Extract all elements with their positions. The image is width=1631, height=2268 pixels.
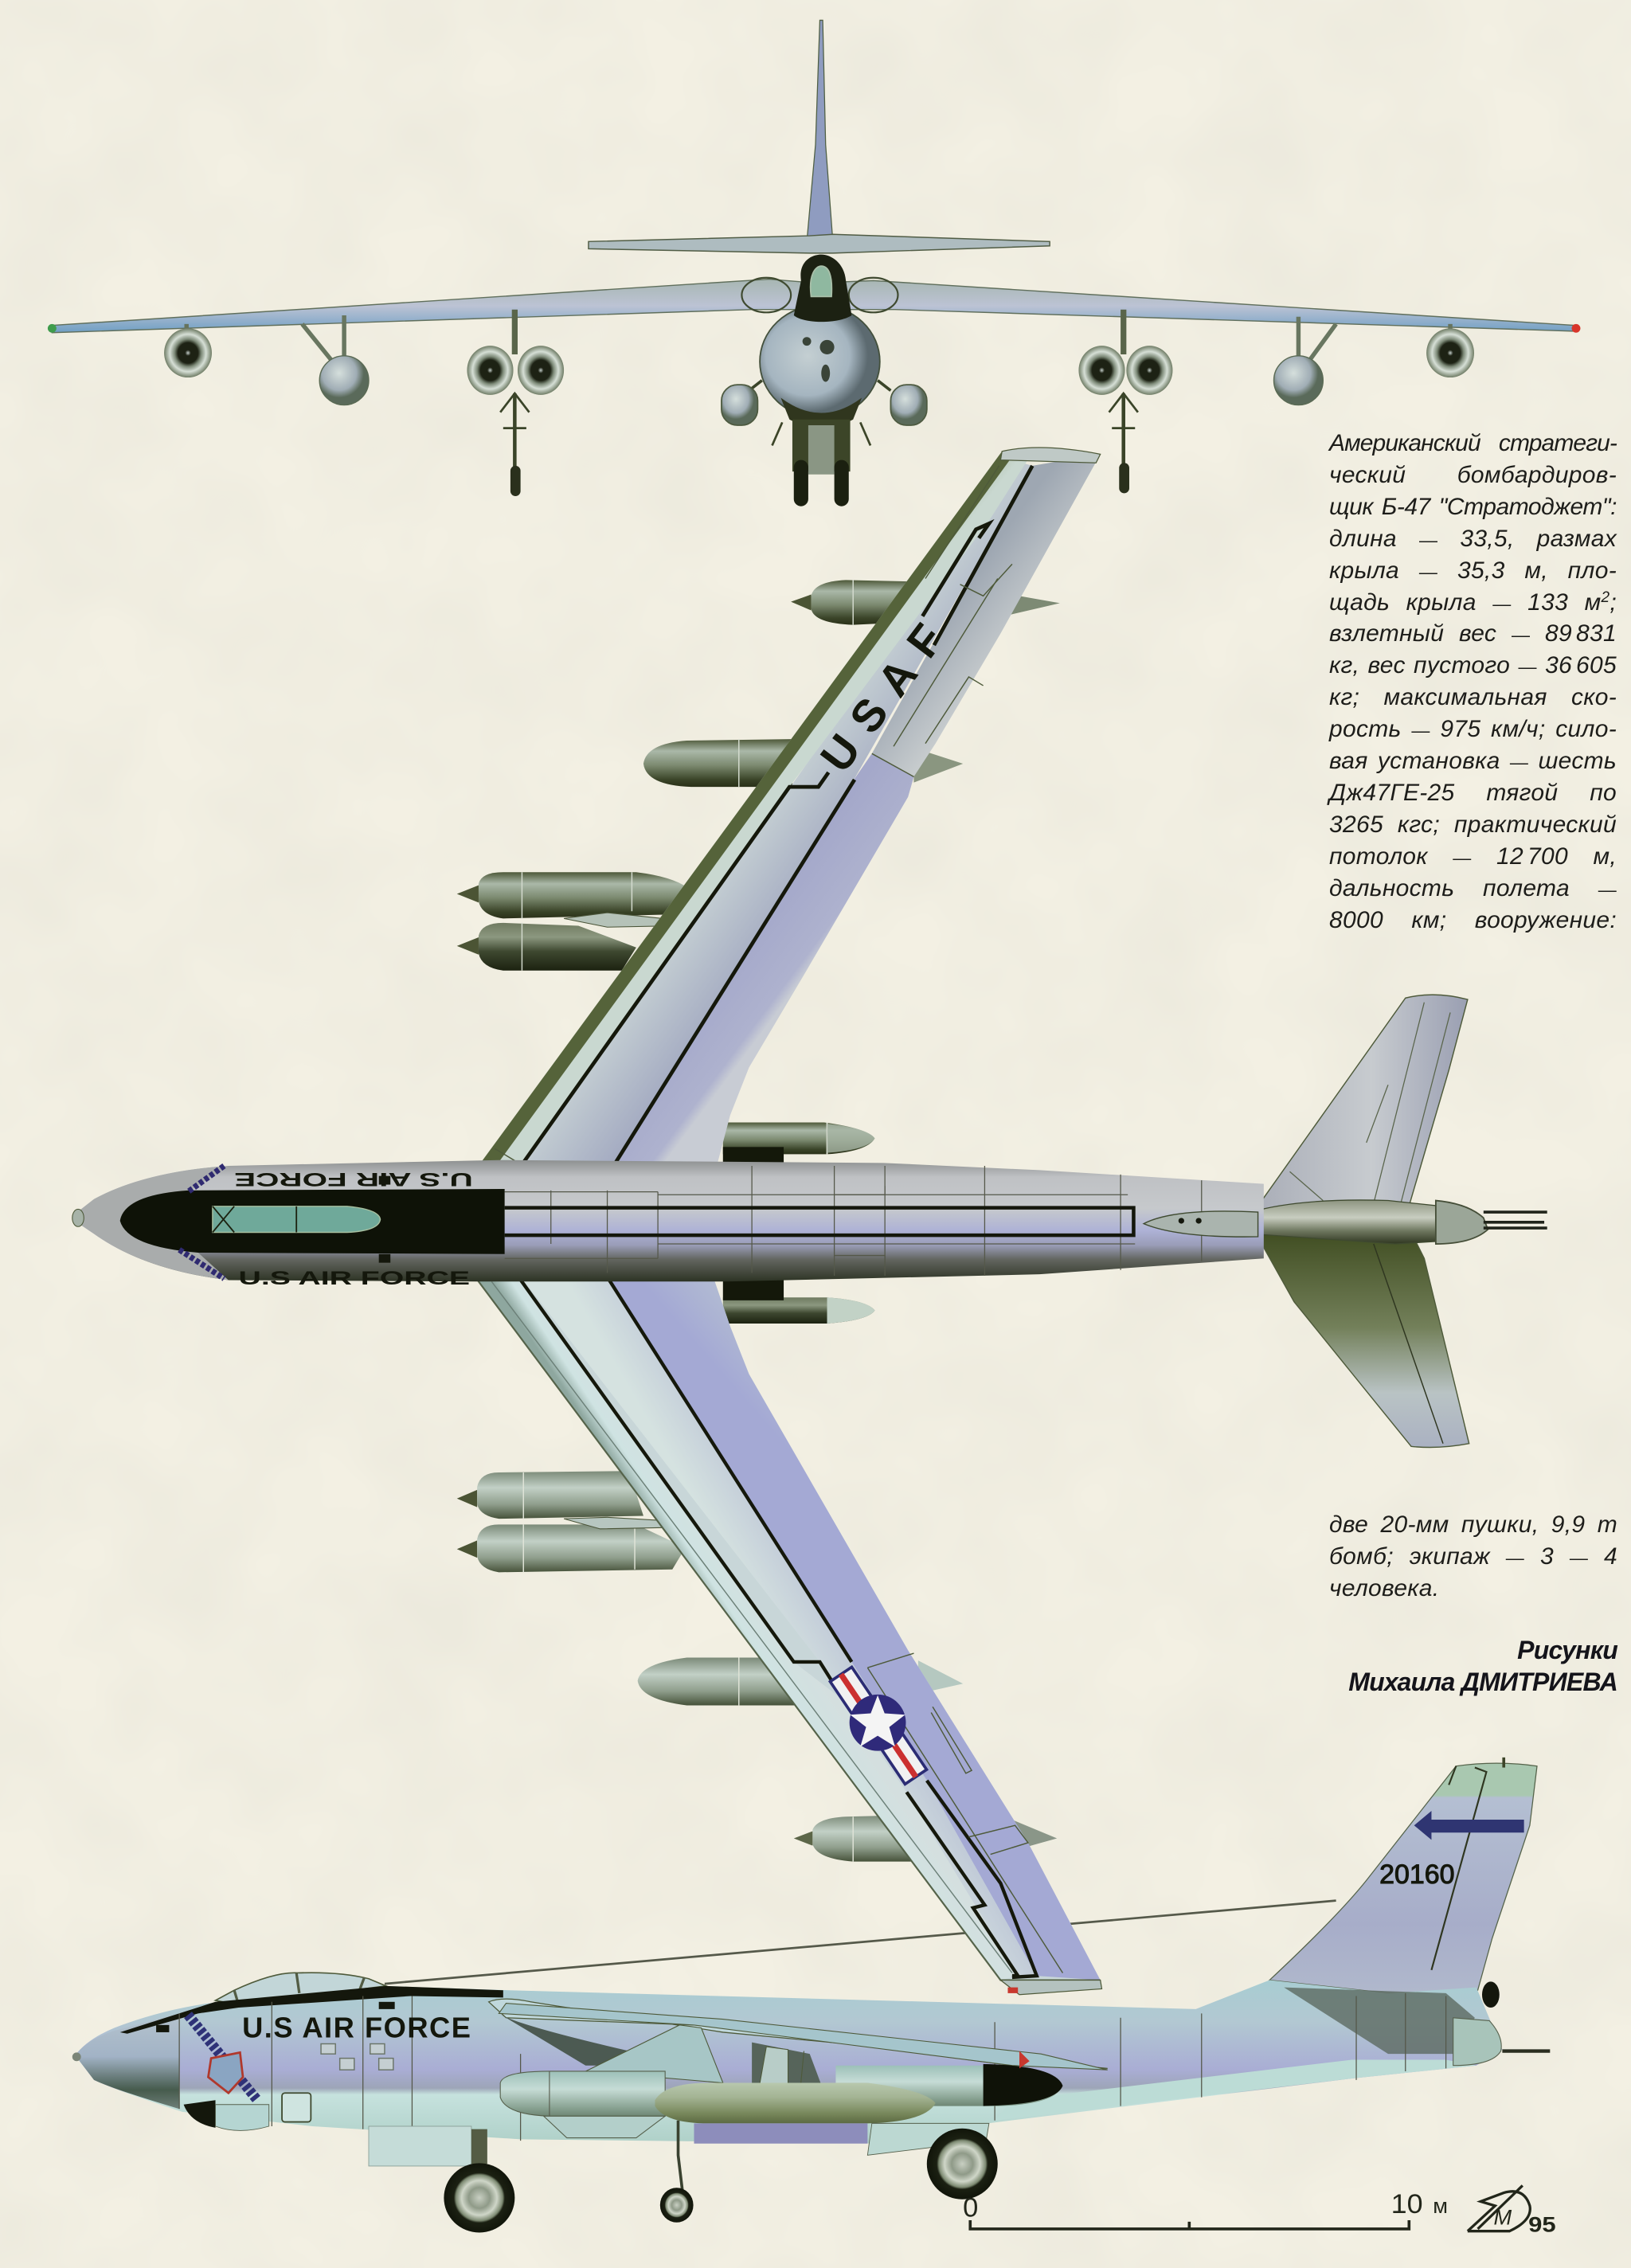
lower wing: edge line [475,1276,1101,1981]
side view: fin rudder line [1431,1766,1486,1970]
upper wing: outer trailing panels [872,454,1101,776]
side view: fin [1269,1763,1537,1993]
text block: specifications: Американский стратеги- [1329,430,1617,456]
monogram year: 95 [1528,2212,1556,2237]
lower wing: trailing panel [600,1265,1101,1981]
upper wing: leading edge [475,452,1030,1180]
side view: nose cone [75,2013,179,2109]
side view: access panel [282,2093,311,2122]
fuselage square hatches [379,1176,390,1263]
scale: line [970,2220,1409,2229]
text block: specifications: 8000 км; вооружение: [1329,907,1617,933]
bubble canopy [213,1206,381,1233]
roundel: lower bar [878,1729,927,1784]
side view: tail number: 20160 [1379,1859,1454,1890]
credit [1348,1636,1618,1696]
side view: unit shield [208,2052,243,2093]
lower wing: red nav light [1007,1988,1018,1993]
lower wing twin engines [457,1471,686,1572]
credit: Рисунки [1517,1636,1617,1664]
side view: tail shadow [1284,1988,1475,2054]
front view: nose detail [803,337,835,382]
front view: horizontal stabilizer [589,234,1050,253]
side view: rear gear door [867,2123,989,2155]
side view: rear wheel [927,2129,998,2200]
text block: specifications: кг; максимальная ско- [1329,684,1617,710]
roundel: disc [850,1695,905,1751]
front view: fuselage [760,305,880,418]
planform aircraft [72,448,1547,1995]
upper wing: tip cap [1000,448,1101,463]
lower wing inner engine [723,1280,874,1324]
upper wing drop tank [643,739,963,787]
monogram letter: М [1494,2205,1512,2230]
text block: specifications: щадь крыла — 133 м2; [1329,589,1617,616]
side view: outrigger strut [679,2121,683,2192]
side view: front wheel [444,2163,514,2233]
text block: armament and crew: человека. [1329,1575,1439,1601]
lower wing drop tank [638,1658,963,1705]
scale: zero label: 0 [963,2193,978,2223]
horizontal stabilizer upper [1254,995,1468,1222]
side view: fin top antenna [1503,1758,1504,1768]
front view: right wing tip light [1572,324,1580,333]
front view: left drop tank [302,315,369,405]
upper wing outer engine [791,580,1060,625]
scale: metre label: м [1433,2193,1448,2218]
text block: specifications: дальность полета — [1329,875,1617,901]
text block: specifications: щик Б-47 "Стратоджет": [1329,494,1617,520]
lower wing: leading edge [475,1261,1018,1981]
side view: middle engine [655,2083,936,2123]
front view: left outer engine [164,324,212,377]
text block: specifications: ческий бомбардиров- [1329,462,1617,488]
front view: left outrigger gear [500,393,530,496]
fuselage panel lines [505,1166,1202,1276]
lower wing: centre stripe [518,1265,1037,1976]
side view: front gear door [369,2126,471,2166]
front view: inner pods [722,381,927,425]
artist monogram [1468,2185,1556,2237]
text block: armament and crew: бомб; экипаж — 3 — 4 [1329,1543,1617,1570]
side view: tail cone [1453,2018,1501,2066]
tail cone [1144,1211,1258,1237]
front view: right outrigger gear [1109,393,1138,493]
side view: lower rear shading [995,2059,1477,2121]
side view: front gear strut [471,2129,487,2164]
side view: canopy [216,1973,386,2004]
upper wing [475,448,1101,1180]
dark cockpit decking [120,1189,505,1254]
side view: nose windows [156,2002,395,2032]
dorsal stripe box [505,1208,1133,1235]
front view: left wing tip light [48,324,57,333]
side view: fuselage [75,1981,1502,2144]
side view: tail gun [1502,2050,1550,2052]
upper wing: USAF lettering: USAF [811,615,953,781]
side view: front intake pod [184,2100,269,2130]
horizontal stabilizer lower [1254,1230,1469,1448]
front view: tail fin [807,20,833,241]
front view: cockpit [794,255,851,322]
nose tip [72,1209,84,1226]
upper wing twin engines [457,872,690,971]
text block: armament and crew [1329,1511,1617,1601]
text block: specifications: Дж47ГЕ-25 тягой по [1329,780,1617,806]
fuselage lettering bottom: U.S AIR FORCE [239,1269,470,1289]
lower wing: black stripes [518,1265,1037,1977]
roundel national insignia [830,1667,927,1784]
tail guns and turret [1250,1200,1547,1244]
scale: ten label: 10 [1391,2189,1423,2219]
front view: belly and main gear [772,397,870,506]
text block: armament and crew: две 20-мм пушки, 9,9 т [1329,1511,1617,1538]
lower wing outer engine [794,1815,1057,1862]
front view: right drop tank [1274,317,1336,405]
text block: specifications [1327,430,1617,933]
side view: rear engine [835,2051,1062,2106]
front view: right outer engine [1426,324,1474,377]
antenna wire [385,1901,1336,1984]
fuselage flipped lettering top: U.S AIR FORCE [234,1168,473,1189]
upper wing: olive leading edge band [475,452,1015,1176]
front view: wing root fairings [741,278,898,312]
front view: right twin engines [1078,310,1172,395]
text block: specifications: взлетный вес — 89831 [1329,620,1617,647]
front view: canopy [811,266,831,296]
side view: diagonal checker band [188,2015,257,2100]
side view: tail bumper [1482,1981,1500,2008]
side view: fuselage lettering: U.S AIR FORCE [242,2011,471,2043]
roundel: star [851,1695,905,1746]
side view aircraft [72,1758,1550,2233]
front view: left twin engines [467,310,564,395]
upper wing inner engine [723,1122,874,1164]
fuselage planform [72,1160,1264,1281]
nose bands [179,1166,224,1279]
side view: dark spine band [120,1986,503,2034]
front view aircraft [48,20,1580,506]
front view: wings [51,280,1576,333]
text block: specifications: рость — 975 км/ч; сило- [1329,716,1617,742]
lower wing: whole shape base [475,1261,1101,1981]
side view: outrigger wheel [660,2188,694,2223]
lower wing: tip cap [1000,1981,1101,1995]
nose grey area [72,1166,229,1280]
upper wing: panel lines [495,466,1012,1180]
credit: Михаила ДМИТРИЕВА [1348,1668,1617,1696]
text block: specifications: вая установка — шесть [1329,748,1617,774]
side view: direction arrow [1414,1811,1524,1840]
upper wing: trailing panel [578,753,913,1180]
text block: specifications: кг, вес пустого — 36605 [1329,652,1617,678]
text block: specifications: потолок — 12700 м, [1329,843,1617,870]
text block: specifications: 3265 кгс; практический [1329,811,1617,838]
roundel: upper bar [830,1667,879,1723]
side view: nose probe [72,2052,81,2061]
side view: forward engine [500,2071,665,2138]
side view: canopy frames [234,1973,365,2004]
upper wing: centre stripe [512,460,1032,1180]
lower wing: panel lines [867,1653,1101,1987]
text block: specifications: длина — 33,5, размах [1329,526,1617,552]
side view: underside lavender [694,2123,867,2144]
scale bar [963,2189,1448,2229]
upper wing: black stripes [512,466,1032,1179]
side view: fuselage panel lines [179,1993,1446,2141]
lower wing [475,1261,1101,1995]
side view: wing [489,1999,1108,2112]
side view: fuselage hatches [321,2043,393,2070]
text block: specifications: крыла — 35,3 м, пло- [1329,557,1617,584]
